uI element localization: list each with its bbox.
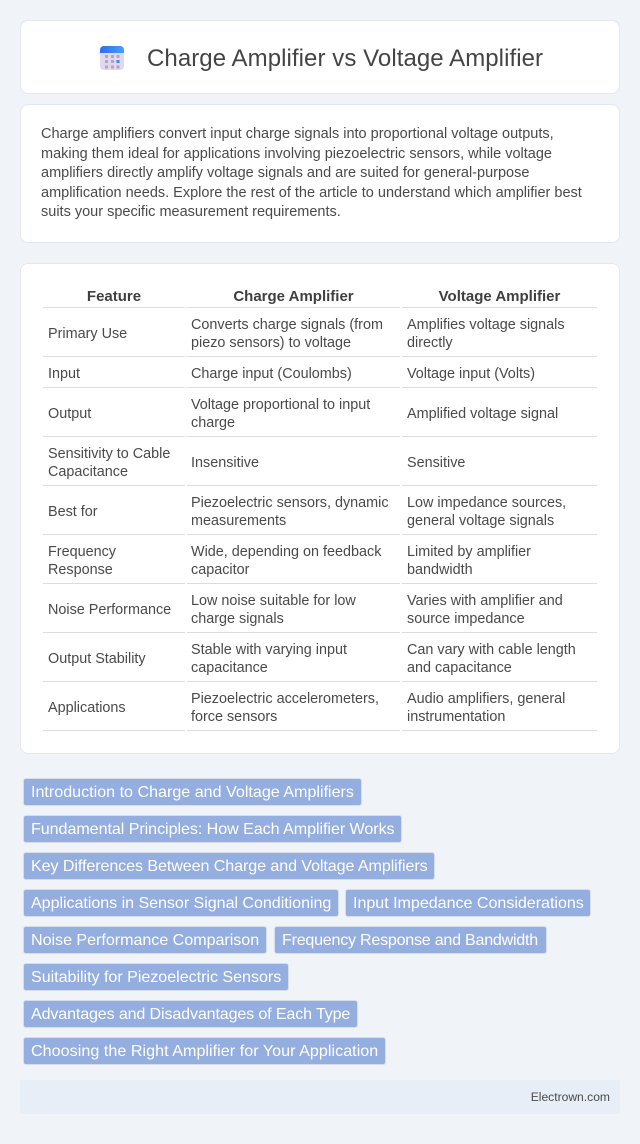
comparison table: Output Stability: [48, 651, 146, 667]
comparison table: bandwidth: [407, 562, 473, 578]
tag: Advantages and Disadvantages of Each Type: [31, 1005, 350, 1023]
tag: Applications in Sensor Signal Conditioning: [31, 894, 331, 912]
tag: [23, 889, 339, 917]
tag: [345, 889, 591, 917]
comparison table: and capacitance: [407, 660, 512, 676]
intro paragraph: making them ideal for applications involving piezoelectric sensors, while voltage: [41, 146, 552, 162]
tag: [23, 1000, 358, 1028]
comparison table card: [20, 263, 620, 754]
comparison table: Piezoelectric sensors, dynamic: [191, 495, 389, 511]
tag: Frequency Response and Bandwidth: [282, 931, 538, 949]
comparison table: Feature: [87, 288, 141, 305]
comparison table: Charge input (Coulombs): [191, 366, 352, 382]
comparison table: Limited by amplifier: [407, 544, 531, 560]
comparison table: Voltage Amplifier: [439, 288, 560, 305]
comparison table: Primary Use: [48, 326, 127, 342]
comparison table: charge: [191, 415, 235, 431]
comparison table: Response: [48, 562, 113, 578]
tag: [23, 1037, 386, 1065]
comparison table: Voltage proportional to input: [191, 397, 370, 413]
comparison table: Can vary with cable length: [407, 642, 576, 658]
tag: [23, 815, 402, 843]
tag: Choosing the Right Amplifier for Your Application: [31, 1042, 378, 1060]
comparison table: Applications: [48, 700, 126, 716]
comparison table: measurements: [191, 513, 286, 529]
footer bar: [20, 1080, 620, 1114]
tag: Key Differences Between Charge and Voltage Amplifiers: [31, 857, 428, 875]
tag: Noise Performance Comparison: [31, 931, 259, 949]
comparison table: Insensitive: [191, 455, 259, 471]
intro paragraph: [41, 126, 582, 220]
comparison table: Frequency: [48, 544, 116, 560]
comparison table: instrumentation: [407, 709, 505, 725]
comparison table: general voltage signals: [407, 513, 554, 529]
tag: Input Impedance Considerations: [353, 894, 584, 912]
comparison table: Best for: [48, 504, 98, 520]
icon: calendar grid: [100, 46, 124, 70]
comparison table: Input: [48, 366, 80, 382]
tag: Suitability for Piezoelectric Sensors: [31, 968, 281, 986]
tag: [23, 778, 362, 806]
comparison table: capacitor: [191, 562, 249, 578]
intro paragraph: amplifiers directly amplify voltage signals and are suited for general-purpose: [41, 165, 529, 181]
tag: [23, 852, 435, 880]
comparison table: Charge Amplifier: [233, 288, 354, 305]
intro paragraph: amplification needs. Explore the rest of the article to understand which amplifier best: [41, 184, 582, 200]
comparison table: directly: [407, 335, 453, 351]
comparison table: source impedance: [407, 611, 525, 627]
tag: [274, 926, 547, 954]
tag: Introduction to Charge and Voltage Amplifiers: [31, 783, 354, 801]
intro paragraph: Charge amplifiers convert input charge signals into proportional voltage outputs,: [41, 126, 554, 142]
comparison table: Capacitance: [48, 464, 128, 480]
comparison table: Audio amplifiers, general: [407, 691, 565, 707]
comparison table: Voltage input (Volts): [407, 366, 535, 382]
header card: [20, 20, 620, 94]
comparison table: Noise Performance: [48, 602, 171, 618]
title: Charge Amplifier vs Voltage Amplifier: [147, 45, 543, 72]
topic tags: [23, 778, 591, 1065]
comparison table: piezo sensors) to voltage: [191, 335, 351, 351]
comparison table: Amplified voltage signal: [407, 406, 558, 422]
comparison table: Varies with amplifier and: [407, 593, 563, 609]
comparison table: [43, 288, 597, 731]
comparison table: Low impedance sources,: [407, 495, 566, 511]
comparison table: Amplifies voltage signals: [407, 317, 565, 333]
footer source text: Electrown.com: [531, 1090, 610, 1104]
comparison table: capacitance: [191, 660, 268, 676]
comparison table: Output: [48, 406, 91, 422]
comparison table: Converts charge signals (from: [191, 317, 383, 333]
comparison table: Low noise suitable for low: [191, 593, 356, 609]
tag: Fundamental Principles: How Each Amplifier Works: [31, 820, 395, 838]
comparison table: Sensitive: [407, 455, 465, 471]
comparison table: Sensitivity to Cable: [48, 446, 170, 462]
intro paragraph: suits your specific measurement requirements.: [41, 204, 341, 220]
intro text card: [20, 104, 620, 243]
comparison table: Wide, depending on feedback: [191, 544, 381, 560]
comparison table: force sensors: [191, 709, 277, 725]
comparison table: charge signals: [191, 611, 284, 627]
tag: [23, 963, 289, 991]
tag: [23, 926, 267, 954]
comparison table: Piezoelectric accelerometers,: [191, 691, 379, 707]
comparison table: Stable with varying input: [191, 642, 347, 658]
